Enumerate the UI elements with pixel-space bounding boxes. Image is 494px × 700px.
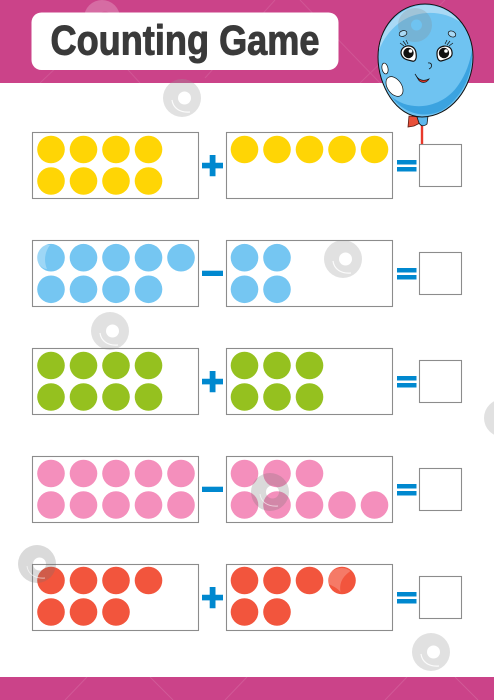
minus sign — [202, 271, 223, 276]
equals sign — [397, 484, 416, 496]
footer band — [0, 677, 494, 700]
row 2: subtraction — [32, 240, 462, 306]
box: first addend — [32, 564, 198, 630]
row 1: addition — [32, 132, 462, 198]
answer box — [420, 468, 462, 510]
left eye — [400, 40, 416, 61]
nose — [428, 63, 432, 69]
header band — [0, 0, 494, 83]
cheek-top spots — [398, 30, 457, 38]
equals sign — [397, 592, 416, 604]
lower shading — [391, 50, 472, 115]
box: second addend — [226, 132, 392, 198]
mouth — [415, 74, 429, 82]
balloon body — [378, 4, 473, 117]
watermark on balloon — [398, 8, 432, 42]
box: first addend — [32, 348, 198, 414]
ribbon bow — [408, 116, 420, 127]
right eye — [437, 40, 453, 61]
equals sign — [397, 268, 416, 280]
title: Counting Game — [50, 16, 320, 64]
watermarks on white — [91, 79, 494, 671]
minus sign — [202, 487, 223, 492]
equals sign — [397, 160, 416, 172]
plus sign — [202, 371, 223, 392]
equals sign — [397, 376, 416, 388]
box: minuend — [32, 240, 198, 306]
row 4: subtraction — [32, 456, 462, 522]
balloon knot — [417, 116, 428, 126]
answer box — [420, 576, 462, 618]
box: subtrahend — [226, 456, 392, 522]
answer box — [420, 144, 462, 186]
row 3: addition — [32, 348, 462, 414]
title panel — [32, 12, 338, 70]
box: minuend — [32, 456, 198, 522]
icon: balloon character — [378, 4, 473, 144]
answer box — [420, 252, 462, 294]
answer box — [420, 360, 462, 402]
plus sign — [202, 587, 223, 608]
row 5: addition — [32, 564, 462, 630]
box: first addend — [32, 132, 198, 198]
plus sign — [202, 155, 223, 176]
balloon string — [421, 122, 423, 144]
box: second addend — [226, 348, 392, 414]
box: second addend — [226, 564, 392, 630]
balloon shine spots — [381, 62, 407, 100]
watermarks over circles — [18, 473, 289, 583]
upper highlight — [379, 5, 460, 50]
box: subtrahend — [226, 240, 392, 306]
